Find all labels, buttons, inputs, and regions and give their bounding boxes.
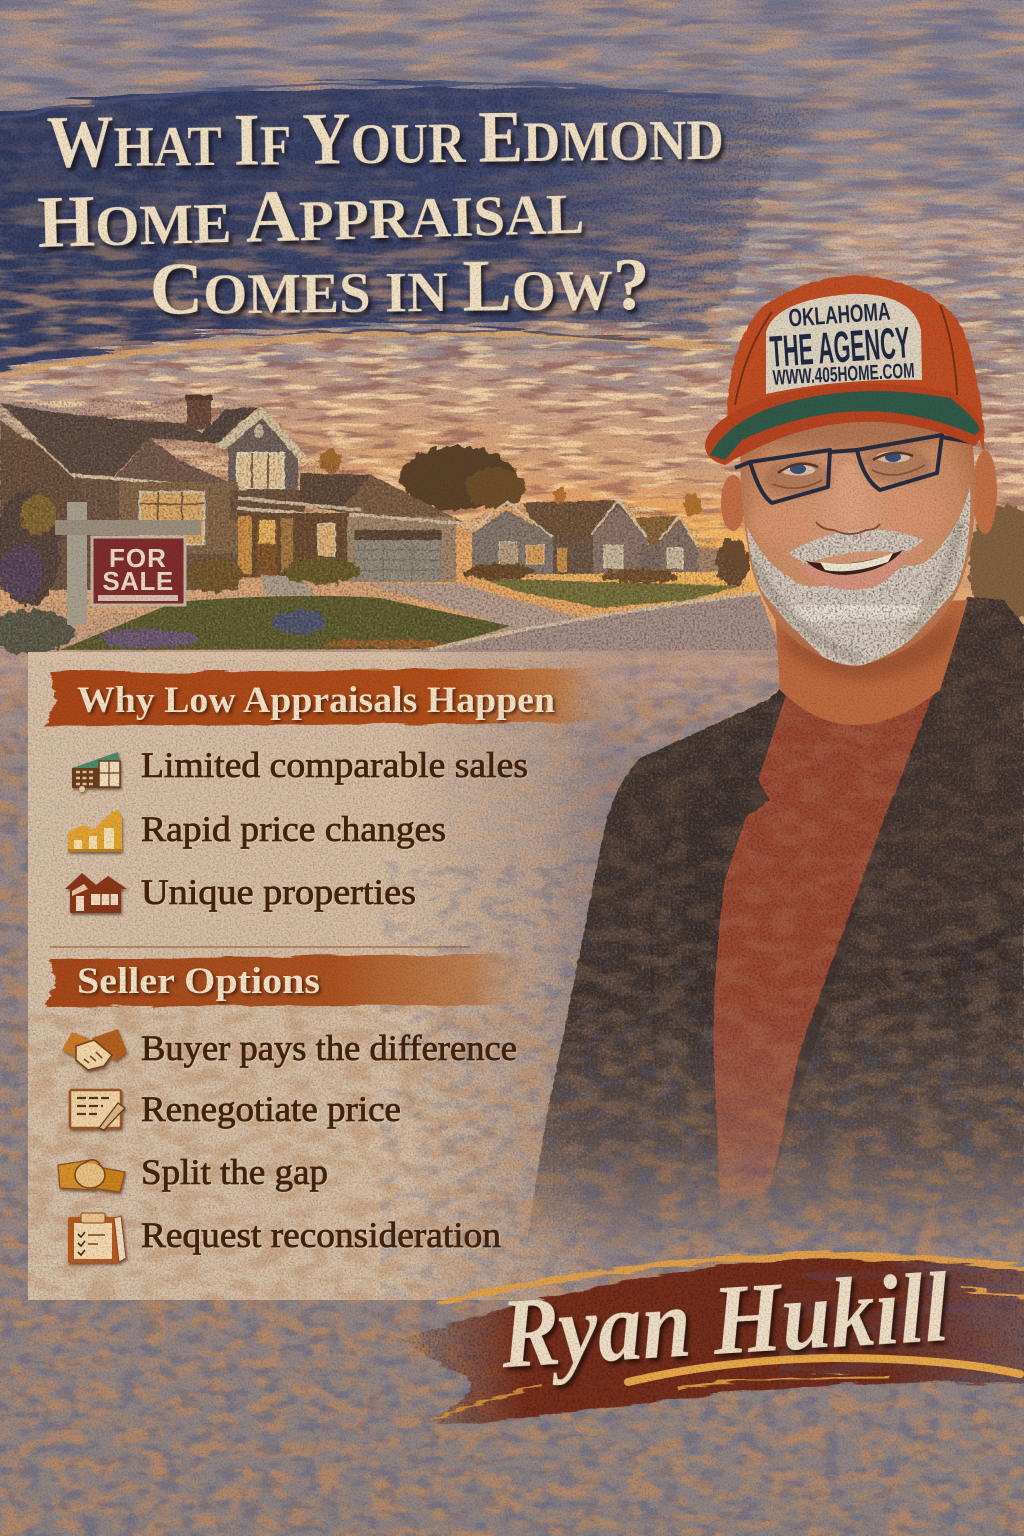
- neighboring houses: [468, 500, 722, 575]
- list item: rapid price changes: [68, 809, 446, 852]
- distant trees: [554, 488, 1024, 625]
- cap patch: [766, 294, 922, 394]
- name: Ryan Hukill: [497, 1251, 952, 1389]
- title brush band: [0, 78, 827, 379]
- for sale sign: [55, 502, 201, 625]
- icon: handshake: [62, 1029, 127, 1070]
- label: Renegotiate price: [141, 1089, 401, 1129]
- eyes: [772, 452, 925, 488]
- label: Split the gap: [141, 1152, 328, 1192]
- cap crown: [727, 276, 985, 452]
- signature banner: [400, 1250, 1024, 1425]
- patch text: [768, 297, 915, 390]
- icon: building grid: [72, 752, 120, 792]
- for sale sign: FOR: [109, 543, 167, 573]
- label: Request reconsideration: [141, 1215, 501, 1255]
- icon: rising chart: [68, 810, 122, 852]
- jacket: [525, 600, 1024, 1260]
- nose: [816, 465, 880, 532]
- neighborhood scene: [0, 0, 1024, 660]
- fabric texture: [530, 597, 1024, 1228]
- icon: clipboard checklist: [68, 1213, 126, 1263]
- panel: parchment: [28, 652, 650, 1300]
- icon: contract and pen: [70, 1090, 125, 1130]
- header brush: [45, 954, 535, 1007]
- brush stroke: [400, 1257, 1024, 1424]
- panel content: seller options: [45, 954, 535, 1263]
- shirt texture: [714, 696, 934, 1208]
- lapels: [714, 688, 783, 1204]
- heading: Why Low Appraisals Happen: [77, 680, 555, 721]
- icon: house: [65, 873, 127, 913]
- title: WHAT IF YOUR EDMOND: [46, 94, 724, 184]
- glasses: [735, 435, 970, 503]
- icon: clasped hands: [58, 1160, 125, 1192]
- label: Rapid price changes: [141, 809, 446, 849]
- heading: Seller Options: [77, 961, 320, 1002]
- face shading: [754, 422, 946, 538]
- label: Buyer pays the difference: [141, 1028, 517, 1068]
- list item: split the gap: [58, 1152, 328, 1192]
- lawn: [60, 596, 510, 650]
- accent strokes: [430, 1256, 1024, 1420]
- background tree: [319, 446, 525, 510]
- man portrait: [500, 276, 1024, 1270]
- list item: buyer pays the difference: [62, 1028, 517, 1070]
- patch text: WWW.405HOME.COM: [772, 359, 915, 390]
- neck: [775, 600, 968, 725]
- header brush: [45, 668, 610, 727]
- shirt: [714, 692, 935, 1210]
- list item: unique properties: [65, 872, 416, 913]
- label: Limited comparable sales: [141, 745, 528, 785]
- brush texture: [400, 1250, 1024, 1425]
- ears: [721, 450, 997, 534]
- list item: limited comparable sales: [72, 745, 528, 792]
- list item: request reconsideration: [68, 1213, 501, 1263]
- title: HOME APPRAISAL: [36, 168, 585, 264]
- smile: [800, 550, 905, 590]
- road and driveway: [365, 578, 780, 652]
- beard and mustache: [747, 487, 970, 666]
- for sale sign: SALE: [102, 566, 174, 596]
- panel content: why low appraisals happen: [45, 668, 610, 913]
- shrubs and flowers: [0, 490, 678, 654]
- list item: renegotiate price: [70, 1089, 401, 1130]
- body: [528, 597, 1024, 1238]
- main house: [0, 395, 468, 595]
- cap brim: [705, 384, 983, 465]
- label: Unique properties: [141, 872, 416, 912]
- patch text: OKLAHOMA: [788, 297, 891, 333]
- painterly scene texture: [0, 397, 778, 650]
- title: [36, 94, 724, 331]
- title: COMES IN LOW?: [149, 244, 650, 331]
- face: [740, 405, 975, 665]
